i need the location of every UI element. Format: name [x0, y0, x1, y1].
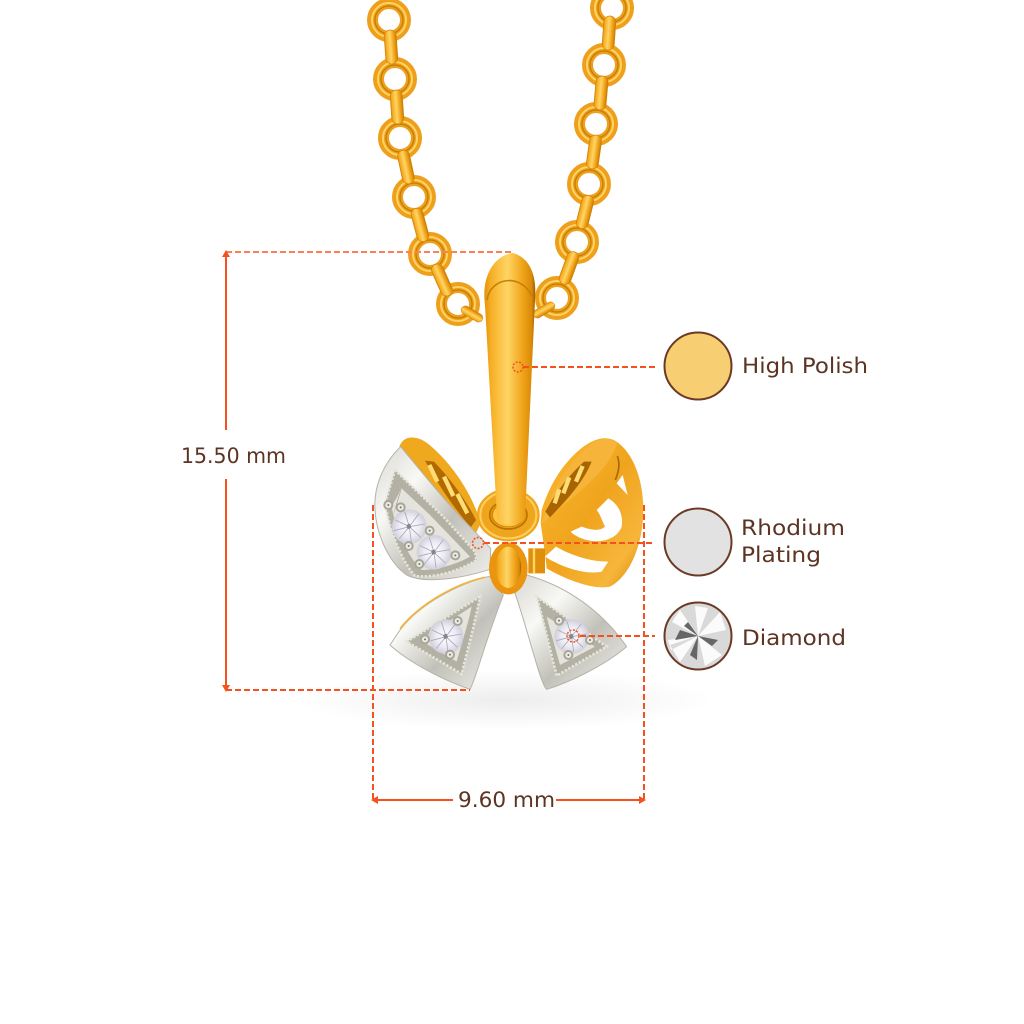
label: high polish: High Polish — [742, 354, 868, 379]
diamonds left — [392, 509, 427, 544]
swatch: rhodium — [664, 508, 732, 576]
bail — [484, 253, 535, 525]
upper left wing — [375, 438, 491, 580]
upper right wing — [528, 438, 643, 587]
leader: rhodium — [472, 538, 655, 548]
label: diamond: Diamond — [742, 626, 846, 651]
dimension: width 9.60 mm — [371, 505, 646, 804]
dimension: height 15.50 mm — [222, 250, 513, 692]
label: width: 9.60 mm — [458, 788, 555, 813]
pendant bow — [375, 438, 643, 689]
swatch: high polish — [664, 332, 732, 400]
shadow — [295, 670, 715, 730]
leader: diamond — [567, 630, 655, 642]
lower left wing — [390, 577, 503, 689]
label: height: 15.50 mm — [181, 444, 286, 469]
label: rhodium plating: Rhodium — [741, 516, 845, 541]
label: rhodium plating — [741, 516, 845, 568]
label: rhodium plating: Plating — [741, 543, 821, 568]
swatch: diamond — [664, 602, 732, 670]
leader: high polish — [513, 362, 655, 372]
chain — [372, 0, 629, 324]
bail ring and knot — [480, 492, 536, 594]
lower right wing — [515, 575, 627, 689]
